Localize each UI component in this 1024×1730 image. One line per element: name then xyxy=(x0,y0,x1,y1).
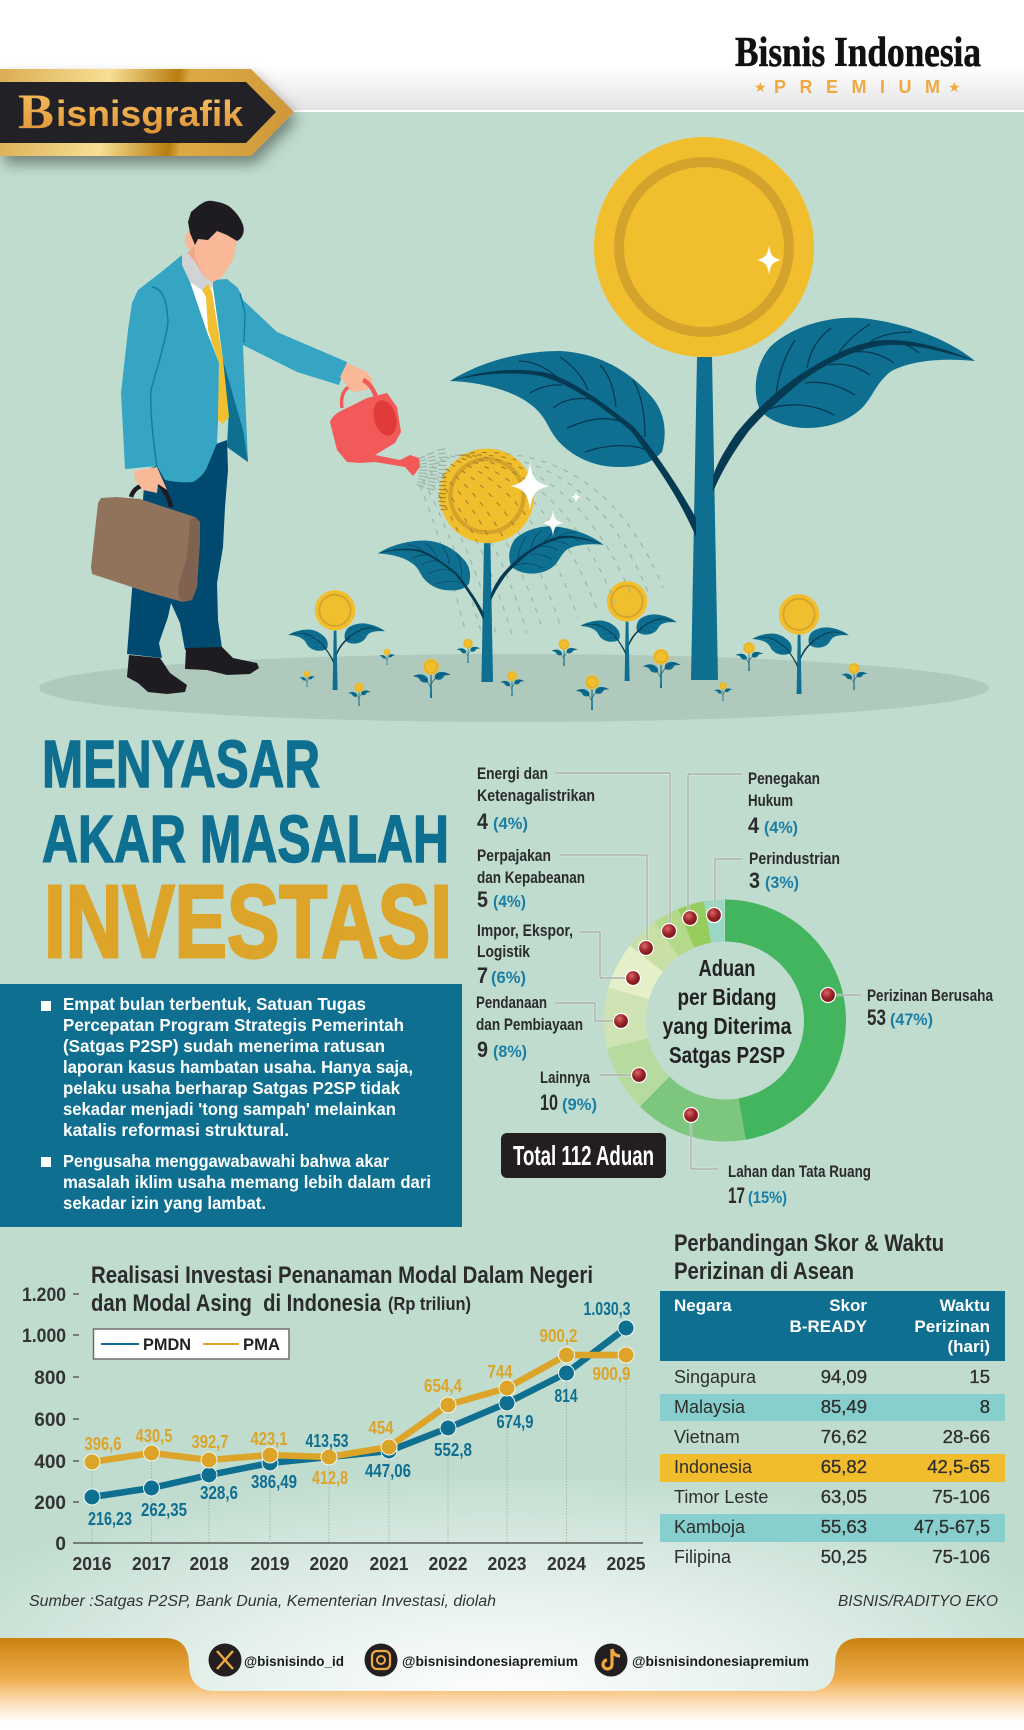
PMA value labels: 654,4 xyxy=(424,1376,462,1396)
PMDN value labels: 447,06 xyxy=(365,1461,411,1481)
line chart heading xyxy=(91,1262,593,1317)
panel: summary text: sekadar menjadi 'tong sampah' melainkan xyxy=(63,1099,396,1119)
table rows: Malaysia xyxy=(674,1397,746,1417)
PMA value labels xyxy=(84,1326,630,1488)
table rows: 55,63 xyxy=(821,1516,867,1537)
label: Pendanaan dan Pembiayaan: Pendanaan xyxy=(476,994,547,1012)
legend: PMA xyxy=(243,1335,280,1354)
logo: Bisnis Indonesia Premium: ★ xyxy=(754,79,767,95)
table rows: 75-106 xyxy=(932,1486,990,1507)
title: INVESTASI xyxy=(44,864,452,979)
label: Lahan dan Tata Ruang: (15%) xyxy=(748,1188,787,1207)
table rows: 76,62 xyxy=(821,1426,867,1447)
panel: summary text: Pengusaha menggawabawahi bahwa akar xyxy=(63,1151,389,1171)
donut leader lines xyxy=(555,773,861,1169)
callout: total complaints xyxy=(501,1133,666,1178)
line chart heading: Realisasi Investasi Penanaman Modal Dalam Negeri xyxy=(91,1262,593,1289)
label: Pendanaan dan Pembiayaan: (8%) xyxy=(493,1042,527,1061)
label: Perpajakan dan Kepabeanan: 5 xyxy=(477,887,488,912)
illustration: ground ellipse xyxy=(39,654,989,722)
chart axes: 0 xyxy=(55,1534,66,1555)
table rows: 47,5-67,5 xyxy=(914,1516,990,1537)
panel: summary text: laporan kasus hambatan usaha. Hanya saja, xyxy=(63,1057,413,1077)
table rows: Indonesia xyxy=(674,1457,753,1477)
chart axes: 2021 xyxy=(370,1553,408,1574)
panel: summary text: (Satgas P2SP) sudah menerima ratusan xyxy=(63,1036,385,1056)
chart axes: 2023 xyxy=(488,1553,526,1574)
label: Penegakan Hukum: 4 xyxy=(748,813,760,838)
label: Impor, Ekspor, Logistik: (6%) xyxy=(491,968,526,987)
donut center label: Aduan xyxy=(698,955,756,981)
table header: (hari) xyxy=(948,1337,990,1356)
footer band xyxy=(0,1638,1024,1730)
label: Perizinan Berusaha: (47%) xyxy=(890,1010,933,1029)
table rows: Filipina xyxy=(674,1547,732,1567)
panel: summary text: pelaku usaha berharap Satgas P2SP tidak xyxy=(63,1078,400,1098)
right shoe xyxy=(185,647,259,675)
PMDN value labels: 328,6 xyxy=(200,1483,238,1503)
PMA value labels: 454 xyxy=(368,1418,394,1438)
table header: Perizinan xyxy=(914,1317,990,1336)
table rows: Timor Leste xyxy=(674,1487,768,1507)
panel: summary text: Empat bulan terbentuk, Satuan Tugas xyxy=(63,994,366,1014)
social: X xyxy=(208,1644,344,1676)
table header: B-READY xyxy=(790,1317,868,1336)
table rows: 85,49 xyxy=(821,1396,867,1417)
label: Lahan dan Tata Ruang xyxy=(728,1163,871,1208)
briefcase xyxy=(91,497,200,602)
label: Perpajakan dan Kepabeanan: (4%) xyxy=(493,892,526,911)
chart axes: 2020 xyxy=(310,1553,348,1574)
label: Energi dan Ketenagalistrikan xyxy=(477,765,595,834)
credit: BISNIS/RADITYO EKO xyxy=(838,1593,998,1610)
neck and ear xyxy=(185,231,213,282)
label: Energi dan Ketenagalistrikan: (4%) xyxy=(493,814,528,833)
PMA value labels: 430,5 xyxy=(136,1426,172,1446)
label: Perpajakan dan Kepabeanan: Perpajakan xyxy=(477,847,551,865)
label: Perindustrian: (3%) xyxy=(765,873,799,892)
PMA value labels: 423,1 xyxy=(250,1429,288,1449)
label: Lahan dan Tata Ruang: 17 xyxy=(728,1183,745,1208)
label: Lainnya: 10 xyxy=(540,1090,558,1115)
line chart heading: (Rp triliun) xyxy=(388,1294,471,1314)
line chart heading: dan Modal Asing di Indonesia xyxy=(91,1290,382,1317)
PMDN value labels: 1.030,3 xyxy=(584,1299,630,1319)
chart axes: 2017 xyxy=(132,1553,171,1574)
PMA value labels: 900,9 xyxy=(592,1364,630,1384)
donut center label: Satgas P2SP xyxy=(669,1042,785,1068)
label: Pendanaan dan Pembiayaan: dan Pembiayaan xyxy=(476,1016,583,1034)
donut center label xyxy=(662,955,792,1068)
PMA value labels: 412,8 xyxy=(312,1468,348,1488)
label: Penegakan Hukum xyxy=(748,770,820,838)
title: MENYASAR xyxy=(42,727,320,802)
label: Energi dan Ketenagalistrikan: Energi dan xyxy=(477,765,548,783)
icon: red watering can xyxy=(330,363,420,476)
label: Lainnya: Lainnya xyxy=(540,1069,591,1087)
table rows xyxy=(674,1366,990,1567)
table heading: Perbandingan Skor & Waktu xyxy=(674,1230,944,1257)
illustration: businessman xyxy=(91,201,347,694)
illustration: water spray xyxy=(420,449,663,637)
illustration: spray over medium coin xyxy=(438,452,526,542)
panel: summary text: masalah iklim usaha memang lebih dalam dari xyxy=(63,1172,431,1192)
label: Perpajakan dan Kepabeanan xyxy=(477,847,585,912)
label: Impor, Ekspor, Logistik: Impor, Ekspor, xyxy=(477,922,573,940)
label: Pendanaan dan Pembiayaan xyxy=(476,994,583,1062)
illustration: big coin plant xyxy=(450,137,975,680)
briefcase handle xyxy=(131,482,171,507)
label: Energi dan Ketenagalistrikan: 4 xyxy=(477,809,489,834)
table rows: Vietnam xyxy=(674,1427,740,1447)
logo: Bisnis Indonesia Premium: Bisnis Indonesia xyxy=(735,30,981,76)
legend: PMDN xyxy=(143,1335,191,1354)
chart axes: 400 xyxy=(34,1452,66,1473)
PMDN value labels xyxy=(88,1299,630,1529)
chart axes: 2016 xyxy=(72,1553,112,1574)
label: Perindustrian: 3 xyxy=(749,868,760,893)
social: X: @bisnisindo_id xyxy=(244,1653,344,1669)
label: Penegakan Hukum: Hukum xyxy=(748,792,793,810)
illustration: small plants xyxy=(288,581,868,710)
trousers xyxy=(127,440,228,658)
label: Impor, Ekspor, Logistik xyxy=(477,922,573,988)
PMA value labels: 396,6 xyxy=(84,1434,122,1454)
hand on briefcase xyxy=(134,467,167,493)
chart axes: 2025 xyxy=(606,1553,646,1574)
label: Penegakan Hukum: (4%) xyxy=(764,818,798,837)
chart axes: 2019 xyxy=(250,1553,290,1574)
panel: summary text: sekadar izin yang lambat. xyxy=(63,1193,266,1213)
logo: Bisnis Indonesia Premium: PREMIUM xyxy=(774,77,940,97)
label: Lainnya: (9%) xyxy=(562,1095,597,1114)
callout: total complaints: Total 112 Aduan xyxy=(513,1140,654,1171)
label: Perizinan Berusaha: 53 xyxy=(867,1005,886,1030)
icon: sparkle on big coin xyxy=(757,245,781,275)
panel: summary text: Percepatan Program Strategis Pemerintah xyxy=(63,1015,404,1035)
label: Lainnya xyxy=(540,1069,597,1115)
PMDN value labels: 262,35 xyxy=(141,1500,187,1520)
logo: Bisnis Indonesia Premium: ★ xyxy=(948,79,961,95)
chart axes: 800 xyxy=(34,1368,66,1389)
title xyxy=(42,727,452,979)
shirt and collar xyxy=(182,253,224,362)
label: Impor, Ekspor, Logistik: Logistik xyxy=(477,943,531,961)
chart axes: 600 xyxy=(34,1410,66,1431)
PMA value labels: 392,7 xyxy=(192,1432,228,1452)
table header xyxy=(660,1291,1005,1361)
table row highlights xyxy=(660,1394,1005,1542)
label: Perizinan Berusaha xyxy=(867,987,994,1030)
donut chart: complaints by field xyxy=(625,920,825,1120)
table rows: 63,05 xyxy=(821,1486,867,1507)
banner: Bisnisgrafik: B xyxy=(18,83,54,139)
table header: Waktu xyxy=(940,1296,990,1315)
label: Perindustrian: Perindustrian xyxy=(749,850,840,868)
label: Pendanaan dan Pembiayaan: 9 xyxy=(477,1037,488,1062)
chart axes: 1.000 xyxy=(22,1326,66,1347)
label: Energi dan Ketenagalistrikan: Ketenagalistrikan xyxy=(477,787,595,805)
label: Impor, Ekspor, Logistik: 7 xyxy=(477,963,488,988)
logo: Bisnis Indonesia Premium xyxy=(735,30,981,97)
title: AKAR MASALAH xyxy=(42,802,449,877)
table rows: Singapura xyxy=(674,1367,757,1387)
table heading: Perizinan di Asean xyxy=(674,1258,854,1285)
table rows: 65,82 xyxy=(821,1456,867,1477)
donut markers xyxy=(614,908,836,1122)
background glow xyxy=(0,1480,1024,1730)
label: Perpajakan dan Kepabeanan: dan Kepabeanan xyxy=(477,869,585,887)
table heading xyxy=(674,1230,944,1285)
table header: Skor xyxy=(829,1296,867,1315)
chart axes: 2024 xyxy=(547,1553,587,1574)
table rows: 15 xyxy=(969,1366,990,1387)
PMDN value labels: 386,49 xyxy=(251,1472,297,1492)
donut center label: per Bidang xyxy=(678,984,776,1010)
panel: summary text xyxy=(0,984,462,1227)
banner: Bisnisgrafik: isnisgrafik xyxy=(56,93,244,134)
table rows: 50,25 xyxy=(821,1546,867,1567)
label: Lahan dan Tata Ruang: Lahan dan Tata Ruang xyxy=(728,1163,871,1181)
panel: summary text: katalis reformasi struktural. xyxy=(63,1120,289,1140)
table rows: 94,09 xyxy=(821,1366,867,1387)
table rows: 42,5-65 xyxy=(927,1456,990,1477)
table rows: 8 xyxy=(980,1396,990,1417)
series: PMDN line xyxy=(84,1320,634,1505)
table rows: Kamboja xyxy=(674,1517,746,1537)
PMDN value labels: 413,53 xyxy=(306,1431,348,1451)
chart axes: 2022 xyxy=(428,1553,468,1574)
chart axes: 1.200 xyxy=(22,1285,66,1306)
table header: Negara xyxy=(674,1296,732,1315)
icon: sparkles near medium coin xyxy=(511,462,581,536)
PMA value labels: 744 xyxy=(488,1362,512,1382)
PMDN value labels: 552,8 xyxy=(434,1440,472,1460)
label: Penegakan Hukum: Penegakan xyxy=(748,770,820,788)
table: Asean comparison xyxy=(660,1291,1005,1567)
header band xyxy=(0,0,1024,112)
legend xyxy=(94,1329,289,1359)
social: Instagram xyxy=(364,1644,578,1676)
label: Perizinan Berusaha: Perizinan Berusaha xyxy=(867,987,994,1005)
donut center label: yang Diterima xyxy=(662,1013,792,1039)
hair xyxy=(188,201,244,245)
face xyxy=(195,231,237,282)
tie xyxy=(202,284,229,424)
chart axes: 200 xyxy=(34,1493,66,1514)
label: Perindustrian xyxy=(749,850,840,893)
social: TikTok: @bisnisindonesiapremium xyxy=(632,1653,809,1669)
social: Instagram: @bisnisindonesiapremium xyxy=(402,1653,578,1669)
line chart: investment realization xyxy=(22,1285,646,1574)
PMDN value labels: 674,9 xyxy=(496,1412,534,1432)
left shoe xyxy=(127,655,187,694)
illustration: medium coin plant xyxy=(378,449,604,682)
PMA value labels: 900,2 xyxy=(540,1326,578,1346)
PMDN value labels: 216,23 xyxy=(88,1509,132,1529)
table rows: 28-66 xyxy=(943,1426,990,1447)
chart axes xyxy=(22,1285,646,1574)
series: PMA line xyxy=(84,1347,634,1470)
banner: Bisnisgrafik xyxy=(0,69,294,156)
social: TikTok xyxy=(594,1644,809,1676)
jacket xyxy=(121,255,347,482)
drop lines xyxy=(92,1355,626,1543)
source note: Sumber :Satgas P2SP, Bank Dunia, Kementerian Investasi, diolah xyxy=(29,1593,496,1610)
PMDN value labels: 814 xyxy=(554,1386,578,1406)
table rows: 75-106 xyxy=(932,1546,990,1567)
chart axes: 2018 xyxy=(190,1553,228,1574)
